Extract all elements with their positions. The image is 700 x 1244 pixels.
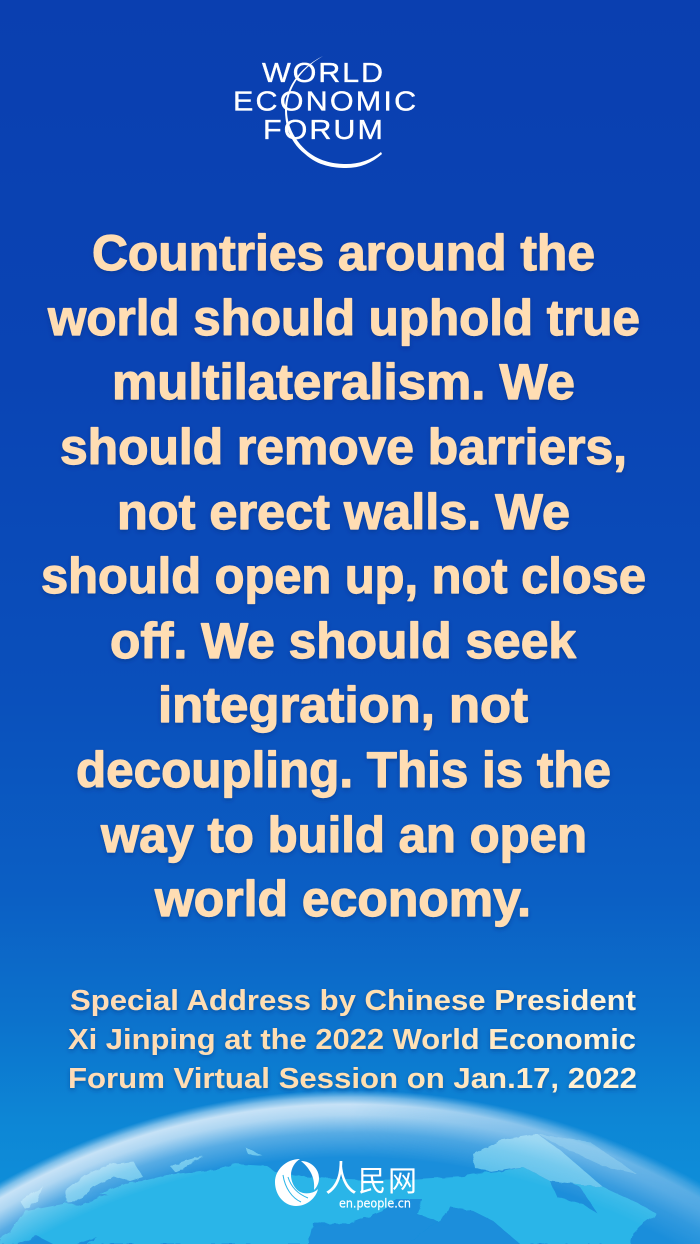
logo text: Chinese name: 民 bbox=[358, 1166, 386, 1198]
People's Daily Online logo bbox=[275, 1158, 417, 1210]
logo text: Economic: ECONOMIC bbox=[233, 86, 416, 117]
main quote: way to build an open bbox=[100, 807, 587, 863]
main quote: should open up, not close bbox=[41, 548, 646, 604]
atmosphere glow bbox=[0, 1085, 700, 1244]
World Economic Forum logo bbox=[233, 56, 416, 168]
main quote: should remove barriers, bbox=[60, 419, 627, 475]
main quote: world economy. bbox=[154, 871, 531, 927]
ocean bbox=[0, 1085, 700, 1244]
logo text: Forum: FORUM bbox=[263, 114, 383, 146]
source attribution: Special Address by Chinese President bbox=[70, 985, 636, 1017]
main quote: not erect walls. We bbox=[117, 484, 570, 540]
main quote bbox=[41, 225, 646, 927]
main quote: world should uphold true bbox=[47, 290, 640, 346]
main quote: decoupling. This is the bbox=[76, 742, 611, 798]
logo icon: swirl bbox=[275, 1159, 319, 1206]
globe bbox=[0, 1085, 700, 1244]
continents bbox=[0, 1134, 657, 1244]
logo text: Chinese name: 人 bbox=[325, 1158, 357, 1199]
logo text: url: en.people.cn bbox=[339, 1196, 411, 1210]
source attribution bbox=[68, 985, 637, 1095]
main quote: multilateralism. We bbox=[112, 354, 575, 410]
main quote: integration, not bbox=[158, 677, 528, 733]
source attribution: Xi Jinping at the 2022 World Economic bbox=[68, 1024, 636, 1056]
source attribution: Forum Virtual Session on Jan.17, 2022 bbox=[68, 1063, 637, 1095]
logo text: Chinese name bbox=[325, 1158, 417, 1199]
main quote: off. We should seek bbox=[110, 613, 576, 669]
logo text: World: WORLD bbox=[262, 57, 383, 89]
main quote: Countries around the bbox=[92, 225, 595, 281]
logo arc bbox=[285, 56, 382, 168]
logo text: Chinese name: 网 bbox=[388, 1166, 417, 1198]
